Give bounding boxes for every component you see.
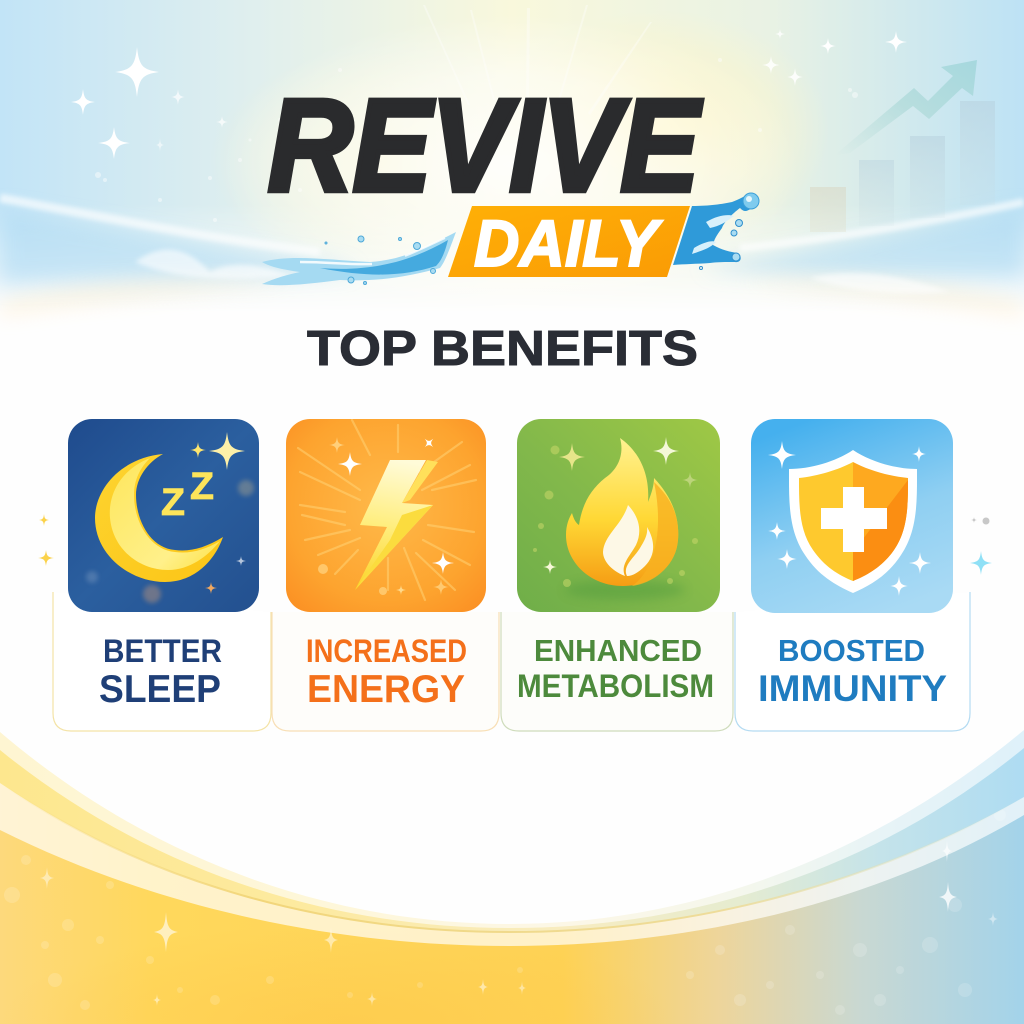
- card outline: [735, 592, 970, 731]
- panel: boosted immunity: [735, 419, 970, 731]
- sparkles: right of cards: [970, 517, 992, 575]
- panel: better sleep: [53, 419, 271, 731]
- logo: Revive Daily: [262, 72, 759, 285]
- card outline: [501, 612, 733, 731]
- icon: crescent moon with Z letters: [68, 419, 259, 612]
- icon: crescent moon with Z letters: Z: [161, 482, 185, 524]
- sparkles: lower corners: [40, 840, 998, 1006]
- bottom background: yellow to blue gradient with curved bands: [0, 700, 1024, 1024]
- icon: shield with cross: [751, 419, 953, 613]
- card outline: [53, 592, 271, 731]
- sparkles: upper left: [71, 47, 228, 159]
- card outline: [272, 612, 499, 731]
- label: increased energy: [306, 633, 467, 711]
- banner: orange parallelogram: [448, 206, 690, 277]
- logo word: REVIVE: REVIVE: [268, 72, 702, 218]
- label: better sleep: SLEEP: [99, 668, 221, 711]
- label: enhanced metabolism: [517, 633, 714, 704]
- label: enhanced metabolism: ENHANCED: [534, 633, 702, 668]
- label: increased energy: ENERGY: [307, 668, 465, 711]
- icon: crescent moon with Z letters: Z: [190, 466, 214, 508]
- label: better sleep: [99, 633, 222, 711]
- label: boosted immunity: IMMUNITY: [758, 668, 947, 709]
- label: boosted immunity: [758, 633, 947, 709]
- panel: enhanced metabolism: [501, 419, 733, 731]
- label: boosted immunity: BOOSTED: [778, 633, 925, 668]
- sparkles: upper right: [762, 29, 907, 86]
- panel: increased energy: [272, 419, 499, 731]
- background growth chart: [810, 60, 995, 232]
- water splash: left of banner: [262, 232, 456, 285]
- water splash: right of banner: [673, 193, 759, 270]
- top background: sky gradient and sunburst: [0, 0, 1024, 299]
- logo word: DAILY: DAILY: [474, 206, 663, 280]
- sparkles: left of cards: [38, 514, 54, 566]
- label: better sleep: BETTER: [103, 633, 222, 669]
- heading: Top Benefits: TOP BENEFITS: [307, 322, 698, 376]
- label: increased energy: INCREASED: [306, 633, 467, 669]
- icon: lightning bolt with rays: [286, 419, 486, 612]
- water wave band behind the logo: [0, 198, 1024, 316]
- icon: flame: [517, 419, 720, 612]
- label: enhanced metabolism: METABOLISM: [517, 668, 714, 704]
